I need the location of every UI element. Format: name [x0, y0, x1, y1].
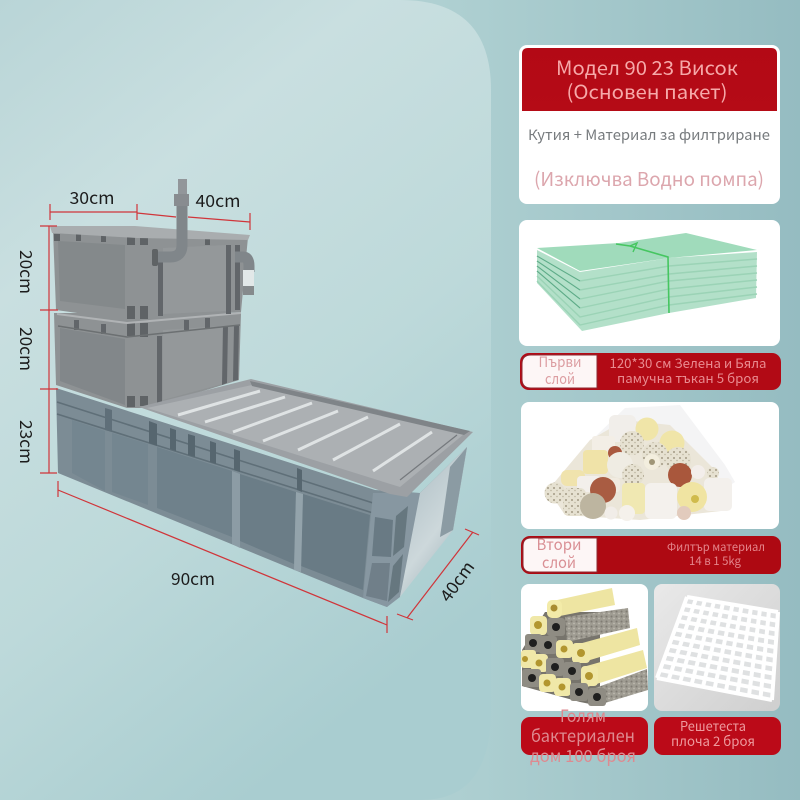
header title: Модел 90 23 Висок: [556, 52, 738, 81]
panel: product photo backdrop: [0, 0, 491, 800]
grid plate text: плоча 2 броя: [671, 730, 755, 750]
media pile: [544, 415, 732, 521]
layer 1 tab: [522, 355, 597, 388]
outlet pipe: [235, 257, 254, 295]
bacteria house text: Голям: [560, 702, 606, 727]
inlet pipe: [152, 179, 189, 266]
label: 90cm: 90cm: [171, 565, 215, 590]
layer 2 label bar: [521, 533, 781, 574]
subtitle: Кутия + Материал за филтриране: [528, 124, 770, 145]
label: 40cm depth: 40cm: [433, 555, 479, 606]
end face: [400, 447, 467, 597]
label: 20cm upper: 20cm: [15, 250, 40, 294]
layer 1 description: [610, 353, 766, 387]
label: 23cm: 23cm: [15, 420, 40, 464]
product: stacked filter boxes: [50, 179, 473, 607]
grid plate label: [654, 715, 781, 755]
label: 20cm middle: 20cm: [15, 327, 40, 371]
panel: filter media photo: [521, 402, 779, 529]
layer 2 description: 14 в 1 5kg: [689, 553, 741, 569]
dimension lines: [40, 204, 479, 633]
lid rim: [50, 226, 250, 240]
panel: grid plate photo: [654, 584, 780, 711]
exclusion note: (Изключва Водно помпа): [534, 165, 764, 192]
corner pillar: [363, 493, 420, 607]
bacteria house label: [521, 702, 648, 767]
layer 1 label bar: [520, 351, 781, 390]
layer 2 name: слой: [542, 551, 576, 573]
grid plate text: Решетеста: [680, 715, 746, 735]
label: 30cm: 30cm: [70, 184, 114, 209]
grid plate text: [671, 715, 755, 750]
cream bars: [548, 588, 647, 687]
panel: bacteria house photo: [521, 584, 648, 711]
layer 1 description: 120*30 см Зелена и Бяла: [610, 353, 766, 372]
layer 1 name: Първи: [538, 351, 582, 372]
upper box lower tier: [54, 313, 241, 408]
layer 2 description: [667, 539, 765, 569]
panel: model header card: [519, 45, 780, 204]
mesh bag: [596, 405, 735, 505]
layer 2 description: Филтър материал: [667, 539, 765, 555]
upper box top tier: [50, 179, 254, 320]
tray lid: [139, 379, 473, 497]
layer 2 name: Втори: [536, 533, 582, 555]
layer 1 description: памучна тъкан 5 броя: [617, 368, 759, 387]
layer 1 name: слой: [545, 368, 575, 389]
header title: (Основен пакет): [566, 76, 728, 105]
bacteria house text: бактериален: [531, 722, 635, 747]
layer 1 name: [538, 351, 582, 389]
header title: [556, 52, 738, 105]
label: 40cm width: 40cm: [196, 187, 240, 212]
stack backing: [522, 612, 600, 706]
bar end faces: [521, 600, 606, 706]
header red band: [522, 48, 777, 111]
base box: [56, 388, 467, 607]
layer 2 name: [536, 533, 582, 573]
layer 2 tab: [523, 538, 597, 572]
cloth stack: [537, 233, 757, 331]
panel: green filter cloth photo: [519, 220, 780, 346]
bacteria house text: [530, 702, 636, 767]
lattice plate: [657, 597, 778, 700]
bacteria house text: дом 100 броя: [530, 742, 636, 767]
gray bars: [565, 608, 648, 706]
